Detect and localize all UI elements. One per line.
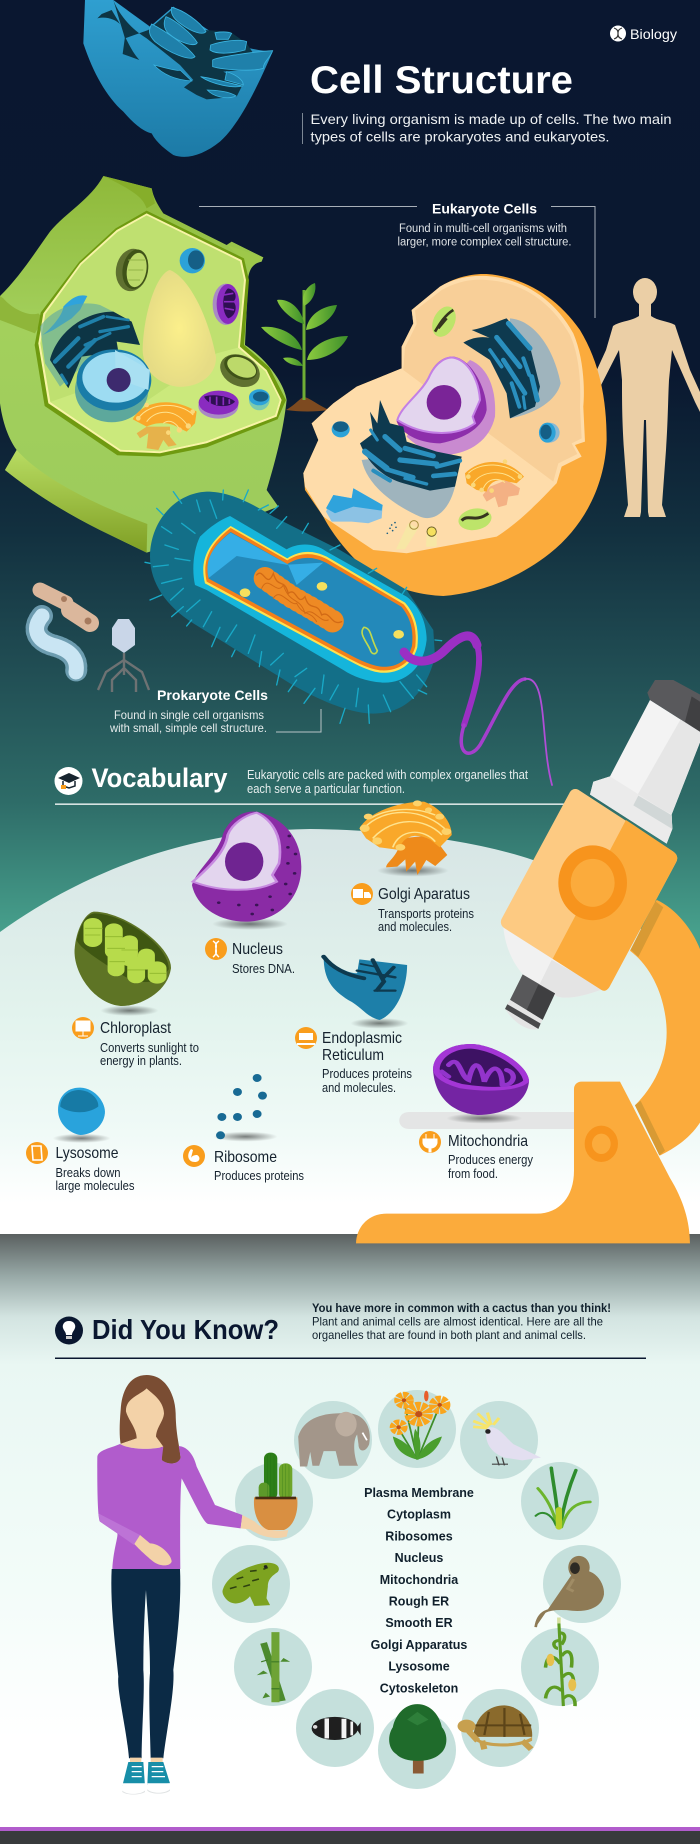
- hair: [120, 1375, 181, 1464]
- cactus: [254, 1453, 297, 1530]
- elephant: [298, 1412, 370, 1466]
- golgi plant: [133, 402, 197, 450]
- lysosomes animal: [332, 421, 560, 443]
- vocabulary: endoplasmic reticulum: [295, 1027, 412, 1095]
- vocabulary: chloroplast: [72, 1017, 199, 1068]
- callout: eukaryote cells: [199, 202, 595, 318]
- chloroplast right: [215, 348, 265, 393]
- illustration: animal cell: [303, 274, 607, 596]
- callout: prokaryote cells: with small, simple cell structure.: [109, 721, 267, 735]
- gray microscope stage: [399, 1112, 580, 1129]
- illustration: woman holding cactus: [97, 1375, 297, 1794]
- ribosome dots: [240, 582, 404, 639]
- vocabulary: endoplasmic reticulum: Reticulum: [322, 1047, 384, 1064]
- vocabulary: golgi aparatus: [351, 883, 474, 934]
- shirt: [97, 1444, 242, 1569]
- plasmid: [362, 627, 377, 654]
- plant cell rough er: [40, 303, 140, 388]
- vocabulary: golgi aparatus: and molecules.: [378, 920, 452, 934]
- frog: [222, 1563, 279, 1606]
- animal nucleus: [397, 357, 495, 455]
- text block: did you know intro: You have more in common with a cactus than you think!: [312, 1301, 611, 1315]
- monkey: [536, 1556, 603, 1627]
- chloroplast illustration: [75, 912, 171, 1016]
- vocabulary: nucleus: [205, 938, 295, 976]
- bacterium hairs: [145, 490, 442, 723]
- list: shared organelles: Mitochondria: [380, 1573, 459, 1587]
- vocabulary: endoplasmic reticulum: Produces proteins: [322, 1067, 412, 1081]
- background: dark gradient panel: [0, 0, 700, 1010]
- vocabulary: golgi aparatus: Transports proteins: [378, 907, 474, 921]
- heading: did you know: Did You Know?: [92, 1314, 279, 1345]
- list: shared organelles: Golgi Apparatus: [371, 1638, 467, 1652]
- intro text block: [302, 111, 672, 144]
- chloroplast top: [113, 246, 151, 294]
- callout: prokaryote cells: [109, 687, 321, 735]
- vocabulary: nucleus: Nucleus: [232, 941, 283, 958]
- list: shared organelles: Ribosomes: [385, 1529, 453, 1543]
- corn: [546, 1617, 576, 1706]
- illustration: microscope: [356, 680, 700, 1243]
- nucleus illustration: [192, 811, 301, 930]
- title: Cell Structure: [310, 59, 573, 102]
- mitochondrion right: [213, 284, 239, 325]
- shoes: [122, 1758, 170, 1794]
- vocabulary: mitochondria: from food.: [448, 1167, 498, 1181]
- heading: vocabulary: each serve a particular function.: [247, 782, 405, 796]
- animal cell body: [303, 274, 607, 596]
- vocabulary: mitochondria: Mitochondria: [448, 1133, 528, 1150]
- vocabulary: chloroplast: energy in plants.: [100, 1054, 182, 1068]
- vocabulary: mitochondria: [419, 1131, 534, 1181]
- callout: prokaryote cells: Found in single cell organisms: [114, 708, 264, 722]
- tan rod bacteria: [40, 590, 92, 624]
- plant nucleus: [75, 349, 151, 422]
- animal cell cytoplasm: [303, 276, 585, 553]
- footer bars: [0, 1827, 700, 1844]
- panel: did you know background: [0, 1234, 700, 1828]
- callout: eukaryote cells: Eukaryote Cells: [432, 202, 537, 216]
- illustration: sprout: [261, 283, 348, 412]
- heading: vocabulary: [54, 763, 565, 805]
- hands: [134, 1535, 172, 1565]
- text block: did you know intro: [312, 1301, 611, 1342]
- vocabulary: endoplasmic reticulum: Endoplasmic: [322, 1030, 402, 1047]
- centrioles and ribosomes: [386, 521, 437, 549]
- rough er upper: [463, 318, 561, 418]
- list: shared organelles: Plasma Membrane: [364, 1486, 474, 1500]
- phage virus: [98, 619, 149, 692]
- vocabulary: chloroplast: Converts sunlight to: [100, 1041, 199, 1055]
- grass: [536, 1468, 590, 1527]
- label: Biology: Biology: [630, 26, 677, 42]
- plant cell wall: [0, 176, 287, 553]
- microscope body: [501, 789, 677, 991]
- list: shared organelles: Cytoskeleton: [380, 1681, 458, 1695]
- callout: prokaryote cells: Prokaryote Cells: [157, 687, 268, 703]
- plant cell wall band: [0, 176, 263, 553]
- vocabulary: lysosome: Breaks down: [56, 1166, 121, 1180]
- vocabulary: lysosome: [26, 1142, 134, 1193]
- list: shared organelles: [364, 1486, 474, 1695]
- callout: eukaryote cells: Found in multi-cell organisms with: [399, 223, 567, 235]
- list: shared organelles: Smooth ER: [385, 1616, 453, 1630]
- vocabulary: golgi aparatus: Golgi Aparatus: [378, 886, 470, 903]
- golgi illustration: [359, 800, 452, 877]
- illustration: human silhouette: [590, 278, 700, 517]
- organisms group: [222, 1391, 603, 1774]
- list: shared organelles: Cytoplasm: [387, 1508, 451, 1522]
- vocabulary: lysosome: Lysosome: [56, 1145, 119, 1162]
- list: shared organelles: Rough ER: [389, 1594, 449, 1608]
- vocabulary: chloroplast: Chloroplast: [100, 1020, 171, 1037]
- bacterium capsule: [150, 492, 435, 714]
- golgi animal: [465, 459, 524, 507]
- icon: biology dna badge: [610, 26, 626, 42]
- mitochondrion lower: [198, 391, 239, 419]
- vocabulary: mitochondria: Produces energy: [448, 1153, 534, 1167]
- rough er lower: [360, 400, 462, 518]
- organism circles: [212, 1390, 621, 1789]
- illustration: flagellum: [404, 636, 552, 785]
- face and neck: [120, 1388, 164, 1449]
- illustration: large endoplasmic reticulum: [83, 0, 273, 157]
- vacuole: [143, 270, 216, 387]
- text block: did you know intro: Plant and animal cells are almost identical. Here are all the: [312, 1314, 603, 1328]
- lysosome lower: [249, 389, 270, 410]
- list: shared organelles: Lysosome: [388, 1660, 450, 1674]
- list: shared organelles: Nucleus: [395, 1551, 443, 1565]
- nucleoid dna: [257, 573, 342, 623]
- organelle illustrations group: [53, 800, 529, 1143]
- heading: vocabulary: Vocabulary: [92, 763, 228, 793]
- vocabulary: ribosome: Produces proteins: [214, 1169, 304, 1183]
- pants: [111, 1569, 180, 1758]
- panel: vocabulary dome: [0, 829, 700, 1236]
- heading: vocabulary: Eukaryotic cells are packed with complex organelles that: [247, 768, 528, 782]
- spiral microbe: [37, 616, 76, 672]
- microscope tube: [590, 680, 700, 844]
- bamboo: [257, 1632, 290, 1702]
- illustration: plant cell: [0, 176, 287, 553]
- text block: did you know intro: organelles that are found in both plant and animal cells.: [312, 1328, 586, 1342]
- smooth er: [43, 295, 87, 335]
- intro text block: Every living organism is made up of cells. The two main: [310, 111, 672, 127]
- cockatoo: [473, 1413, 541, 1465]
- ribosome illustration: [213, 1074, 278, 1142]
- turtle: [458, 1705, 532, 1749]
- smooth er animal: [326, 488, 383, 523]
- callout: eukaryote cells: larger, more complex cell structure.: [398, 236, 572, 248]
- illustration: prokaryote bacterium: [145, 490, 442, 723]
- vocabulary: endoplasmic reticulum: and molecules.: [322, 1081, 396, 1095]
- bacterium cell wall: [193, 516, 427, 683]
- microscope base: [356, 1082, 690, 1243]
- microscope arm: [630, 900, 700, 1155]
- vocabulary: nucleus: Stores DNA.: [232, 962, 295, 976]
- microscope lower lens: [503, 927, 603, 1029]
- vocabulary: lysosome: large molecules: [56, 1179, 134, 1193]
- clownfish: [312, 1717, 361, 1740]
- vocabulary: ribosome: [183, 1145, 304, 1183]
- endoplasmic reticulum illustration: [324, 957, 408, 1029]
- plant cell membrane and interior: [35, 211, 286, 457]
- lysosome illustration: [53, 1088, 111, 1143]
- small mitochondria animal: [428, 303, 493, 533]
- intro text block: types of cells are prokaryotes and eukaryotes.: [310, 128, 610, 144]
- vocabulary: ribosome: Ribosome: [214, 1149, 277, 1166]
- flowers: [393, 1391, 445, 1460]
- illustration: small microbes: [37, 590, 149, 692]
- lysosome top: [180, 248, 205, 273]
- holding hand: [241, 1515, 288, 1538]
- tree: [389, 1704, 446, 1774]
- mitochondrion illustration: [433, 1044, 529, 1124]
